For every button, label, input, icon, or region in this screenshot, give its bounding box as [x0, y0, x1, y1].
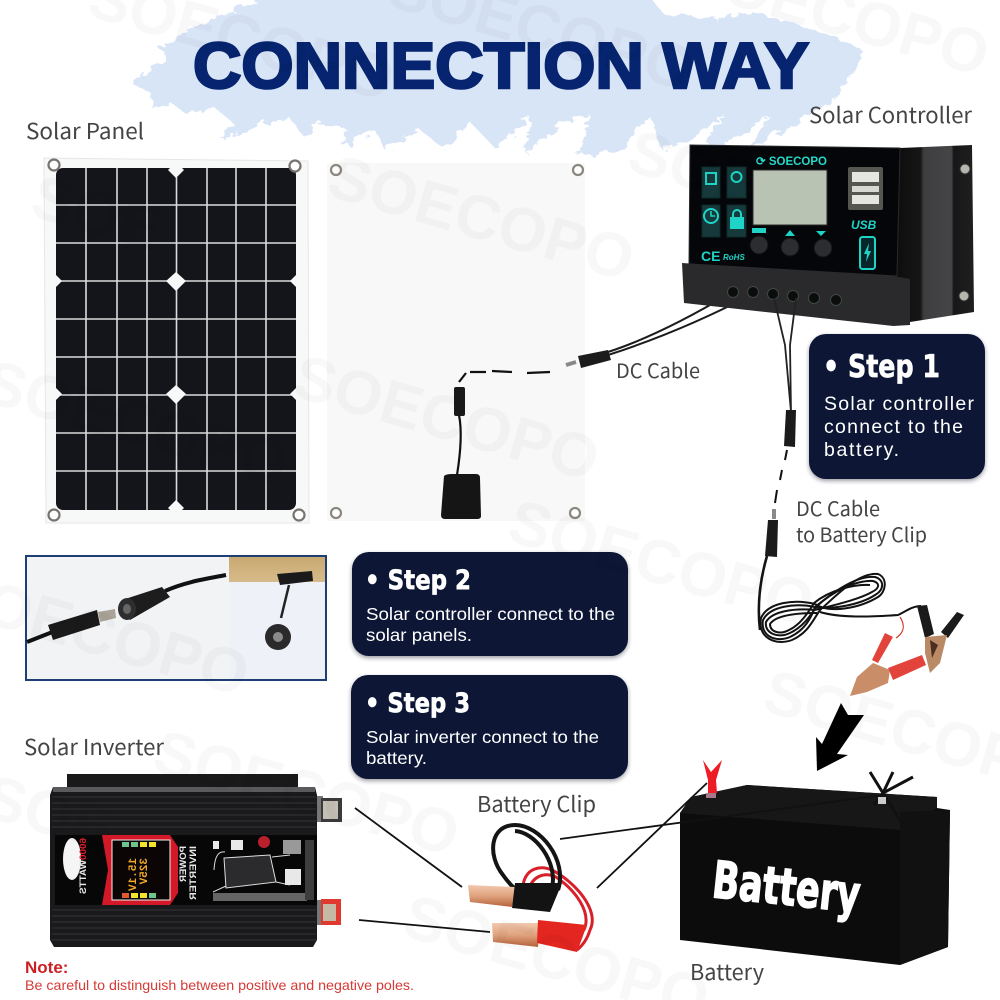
power inverter text: INVERTER	[188, 846, 198, 901]
label: dc cable: DC Cable	[616, 355, 700, 384]
wires from controller	[774, 298, 796, 412]
solar cells grid	[56, 168, 296, 510]
black cable loop	[493, 825, 560, 895]
note	[25, 958, 414, 993]
step 3 card	[351, 675, 628, 779]
red lead	[896, 617, 903, 638]
label: dc cable to battery clip: to Battery Clip	[796, 519, 927, 548]
label: battery clip: Battery Clip	[477, 787, 596, 819]
label: battery: Battery	[690, 955, 765, 987]
red display surround	[102, 835, 178, 905]
step 3 body: Solar inverter connect to the	[366, 727, 599, 747]
red clamp	[492, 920, 587, 952]
usb text: USB	[851, 218, 877, 232]
label: dc cable to battery clip	[796, 493, 927, 548]
connector lines clips to battery	[560, 783, 883, 888]
black terminal clip	[870, 772, 913, 833]
step 1 heading: • Step 1	[823, 349, 940, 385]
terminal holes	[728, 286, 842, 306]
black clamp	[917, 605, 964, 673]
ce text: CE	[701, 248, 720, 264]
label strip	[55, 835, 317, 905]
rohs text: RoHS	[723, 253, 745, 262]
black clamp	[468, 883, 562, 912]
lead down to coil	[759, 556, 767, 630]
junction wire	[457, 415, 461, 475]
back grommets	[331, 165, 583, 518]
junction box	[441, 474, 481, 519]
step 3 body: battery.	[366, 748, 427, 768]
note: Note:	[25, 958, 68, 977]
battery cable and alligator clips	[759, 298, 964, 696]
mode icons	[702, 167, 746, 237]
upper connector	[784, 410, 796, 447]
watermark: SOECOPO	[146, 717, 467, 870]
controller side	[893, 145, 974, 325]
dashed connection	[775, 450, 787, 503]
label: solar inverter: Solar Inverter	[24, 730, 164, 762]
mounting screws	[959, 164, 970, 301]
title: CONNECTION WAY	[193, 29, 809, 102]
step 1 body: battery.	[824, 439, 899, 461]
watermark: SOE	[24, 162, 169, 265]
controller front	[689, 145, 900, 276]
battery lid	[680, 785, 937, 830]
junction connector	[454, 387, 465, 416]
lower connector	[772, 509, 776, 519]
icon glyphs	[704, 172, 743, 228]
wire to clamps	[820, 606, 921, 617]
panel lead	[265, 571, 313, 650]
black arrow to battery	[816, 703, 864, 771]
step 2 card	[352, 552, 628, 656]
solar inverter	[50, 774, 342, 947]
solar controller	[682, 145, 974, 326]
photo right background	[229, 557, 325, 582]
step 1 body: connect to the	[824, 416, 963, 438]
battery body	[680, 785, 950, 965]
phone icon	[860, 237, 875, 269]
label: dc cable to battery clip: DC Cable	[796, 493, 880, 522]
logo: ⟳ SOECOPO	[756, 156, 827, 168]
watermark: SOECOPO	[501, 487, 822, 640]
terminal posts	[706, 793, 716, 798]
cell lines	[56, 168, 296, 510]
dc connector to controller	[566, 294, 753, 368]
step 2 body: solar panels.	[366, 625, 472, 645]
red terminal clip	[703, 760, 722, 793]
two controller wires	[608, 294, 753, 355]
display	[112, 840, 170, 900]
step 3 heading: • Step 3	[365, 688, 470, 719]
inverter body	[50, 787, 317, 947]
red terminal	[317, 899, 341, 925]
centre diamonds	[50, 162, 302, 516]
display readout	[128, 858, 151, 891]
female plug	[118, 575, 226, 620]
label: solar panel: Solar Panel	[26, 114, 144, 146]
step 2 body	[366, 604, 615, 645]
watermark: SOECOPO	[286, 342, 607, 495]
watermark: SOECOPO	[321, 142, 642, 295]
bolt	[864, 243, 871, 262]
lcd	[753, 170, 827, 225]
display bars	[122, 842, 156, 898]
label: solar controller: Solar Controller	[809, 98, 972, 130]
top terminal	[317, 796, 342, 822]
solar panel front	[44, 158, 309, 523]
buttons	[750, 236, 832, 257]
coiled cable	[760, 574, 921, 642]
button marks	[752, 228, 826, 236]
power inverter text	[178, 846, 198, 901]
title brush stroke background	[132, 0, 862, 158]
photo: dc plug connection	[26, 556, 326, 680]
wattage text: 6000 WATTS	[78, 838, 88, 894]
step 1 body: Solar controller	[824, 393, 974, 415]
power inverter text: POWER	[178, 846, 188, 883]
battery clip set	[468, 825, 592, 952]
usb ports	[848, 167, 883, 210]
step 3 body	[366, 727, 599, 768]
display readout: 325V	[139, 858, 151, 885]
display readout: 15.1V	[128, 858, 140, 891]
red cable loop	[523, 868, 592, 950]
controller base	[682, 263, 910, 326]
step 1 card	[809, 334, 985, 479]
step 2 heading: • Step 2	[365, 565, 471, 596]
heatsink ribs	[52, 797, 316, 940]
watermark: SOE	[621, 117, 766, 220]
battery wording: Battery	[710, 851, 863, 925]
inverter flange	[67, 774, 298, 787]
male plug	[27, 609, 116, 642]
step 2 body: Solar controller connect to the	[366, 604, 615, 624]
grommets	[48, 160, 304, 520]
solar panel back	[327, 163, 585, 521]
circuit diagram	[213, 836, 314, 901]
note: Be careful to distinguish between positive and negative poles.	[25, 977, 414, 993]
oval logo	[63, 838, 81, 880]
battery	[680, 760, 950, 965]
red clamp	[850, 633, 926, 696]
dashed link panel to cable	[459, 371, 550, 382]
step 1 body	[824, 393, 974, 461]
connector lines inverter to clips	[355, 808, 490, 932]
